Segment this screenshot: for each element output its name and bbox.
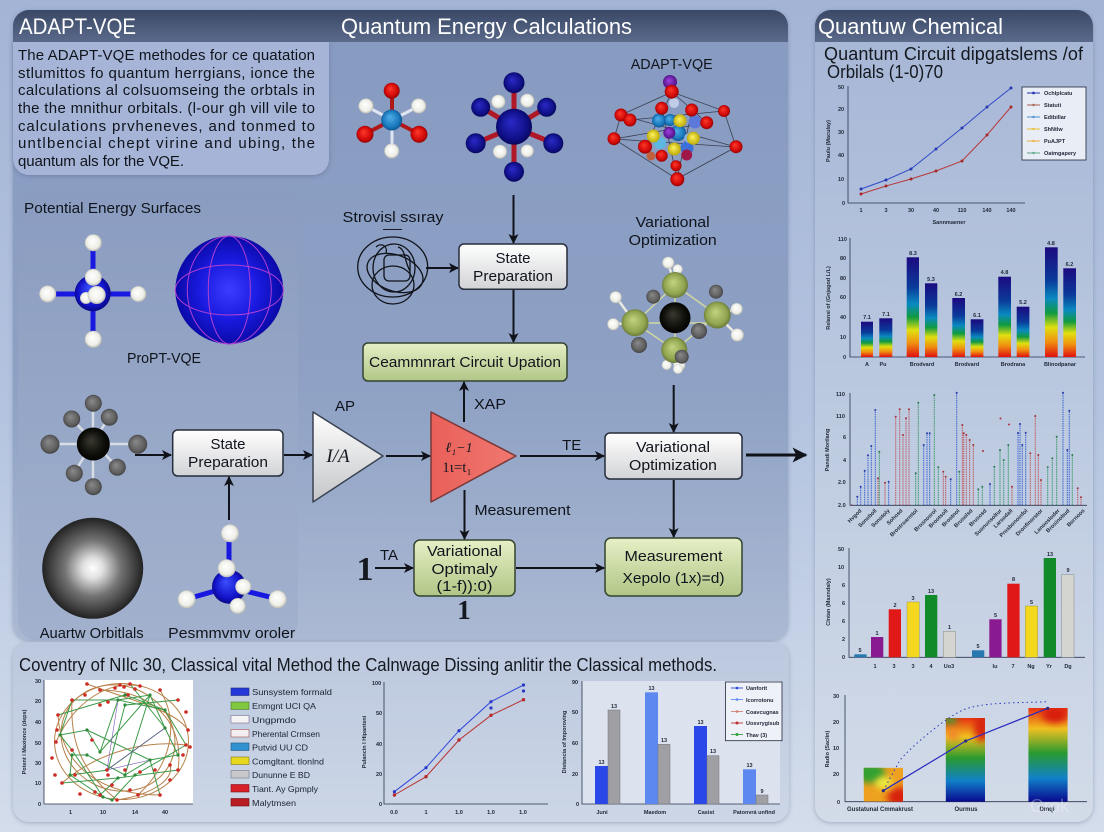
- chart: comparison bar chart: Juni: [596, 810, 608, 816]
- chart: dashed stem plot: Pansdi Mortlang: [825, 429, 831, 471]
- chart: network scatter plot: 0: [38, 802, 41, 808]
- chart: grouped colour bar chart: 1: [873, 664, 877, 670]
- chart: heatmap bars with trend lines: 0: [837, 800, 840, 806]
- chart: rainbow bar chart: 7.1: [863, 315, 871, 321]
- legend: line chart: Edtbillar: [1044, 115, 1067, 121]
- legend: line chart: Ochlplcatu: [1044, 91, 1072, 97]
- box: state preparation top: State: [495, 250, 531, 267]
- heading: classical comparison: Coventry of NIlc 30, Classical vital Method the Calnwage Dissing anlitir the Classical methods.: [19, 655, 717, 675]
- chart: dashed stem plot: [825, 392, 1087, 539]
- chart: heatmap bars with trend lines: Radio (Saclin): [825, 730, 831, 767]
- chart: grouped colour bar chart: 2: [893, 603, 897, 609]
- chart: dashed stem plot: 110: [836, 414, 845, 420]
- arrow: optimality to measurement: [516, 567, 604, 569]
- arrow: white triangle to red triangle: [386, 455, 430, 457]
- header bar: quantum chemical: [815, 10, 1093, 42]
- chart: line chart of orbitals: 40: [838, 153, 844, 159]
- text block: introduction: stlumittos fo quantum herrgians, ionce the: [18, 65, 315, 82]
- legend: methods: Malytmsen: [252, 798, 296, 808]
- chart: rainbow bar chart: 6.1: [973, 313, 981, 319]
- label: atomic orbitals: Auartw Orbitlals: [40, 625, 144, 642]
- chart: dashed stem plot: 4: [843, 458, 847, 464]
- chart: dashed stem plot: Hvgod: [847, 508, 863, 525]
- chart: dashed stem plot: Larsodall: [993, 508, 1015, 530]
- chart: grouped colour bar chart: 1: [875, 631, 879, 637]
- legend: line chart: Oatmgapery: [1044, 151, 1077, 157]
- chart: rainbow bar chart: 110: [838, 237, 847, 243]
- legend: methods: Comgltant. tlonlnd: [252, 756, 324, 766]
- legend: comparison bar chart: Icorrotonu: [746, 698, 774, 704]
- icon: atom cluster: [608, 75, 742, 186]
- box: variational optimally: [414, 540, 515, 596]
- chart: network scatter plot: 10: [100, 810, 106, 816]
- box: state preparation left: Preparation: [188, 454, 268, 471]
- chart: network scatter plot: 1: [69, 810, 72, 816]
- triangle: red operator gate: 1ι=t₁: [442, 460, 472, 476]
- label: ProPT-VQE: ProPT-VQE: [127, 350, 201, 367]
- chart: grouped colour bar chart: 8: [1012, 577, 1015, 583]
- arrow: red triangle to variational optimization: [520, 455, 604, 457]
- chart: dashed stem plot: Suonunsoltur: [974, 508, 1004, 538]
- arrow: red triangle up to circuit update: [463, 382, 465, 422]
- label: numeral one left: 1: [356, 551, 374, 588]
- chart: grouped colour bar chart: 4: [929, 664, 933, 670]
- chart: line chart of orbitals: 110: [958, 208, 966, 214]
- chart: heatmap bars with trend lines: 10: [833, 746, 839, 752]
- chart: rainbow bar chart: 6.2: [1066, 262, 1073, 268]
- chart: rainbow bar chart: Brodvard: [955, 362, 979, 368]
- label: variational optimization: Variational: [636, 214, 710, 231]
- legend: comparison bar chart: Coavcugnas: [746, 710, 779, 716]
- legend: methods: [231, 687, 332, 808]
- chart: rainbow bar chart: Blinodpanar: [1044, 362, 1077, 368]
- icon: blue and white molecule lower: [178, 524, 287, 614]
- triangle: red operator gate: [431, 412, 516, 502]
- text block: introduction: untlbencial chept virine and ubing, the: [18, 135, 315, 152]
- label: variational optimization: [629, 214, 717, 249]
- chart: dashed stem plot: Bornoos: [1066, 508, 1086, 528]
- chart: grouped colour bar chart: 3: [911, 596, 915, 602]
- chart: line chart of orbitals: 140: [1006, 208, 1016, 214]
- label: TE: TE: [562, 437, 581, 454]
- chart: grouped colour bar chart: Ng: [1027, 664, 1035, 670]
- chart: network scatter plot: 30: [35, 761, 41, 767]
- chart: grouped colour bar chart: 10: [838, 565, 844, 571]
- chart: comparison line chart: 1.0: [519, 810, 527, 816]
- chart: line chart of orbitals: 3: [884, 208, 888, 214]
- text block: introduction: [13, 42, 329, 175]
- chart: rainbow bar chart: Brodvard: [910, 362, 934, 368]
- label: polymer molecule: Pesmmvmv oroler: [168, 625, 295, 642]
- icon: black and grey molecule: [40, 395, 147, 495]
- chart: dashed stem plot: Brusosd: [968, 508, 988, 528]
- legend: methods: Ungpmdo: [252, 715, 296, 725]
- chart: comparison bar chart: 13: [661, 738, 667, 744]
- heading: potential energy surfaces: Potential Energy Surfaces: [24, 200, 201, 217]
- chart: network scatter plot: 10: [35, 781, 41, 787]
- box: state preparation top: [459, 244, 567, 289]
- chart: grouped colour bar chart: 6: [842, 601, 845, 607]
- legend: methods: Enmgnt UCI QA: [252, 701, 316, 711]
- legend: comparison bar chart: [726, 682, 782, 741]
- box: variational optimally: (1-f)):0): [436, 578, 492, 595]
- box: state preparation top: Preparation: [473, 268, 553, 285]
- chart: grouped colour bar chart: 3: [911, 664, 915, 670]
- chart: comparison line chart: 0.0: [390, 810, 398, 816]
- chart: comparison bar chart: 13: [611, 704, 617, 710]
- legend: methods: Putvid UU CD: [252, 742, 308, 752]
- chart: dashed stem plot: Brosinobud: [1045, 508, 1071, 534]
- subheading: quantum circuit diagrams: Quantum Circuit dipgatslems /of: [824, 44, 1084, 64]
- chart: rainbow bar chart: 5.2: [1019, 300, 1027, 306]
- chart: grouped colour bar chart: 13: [1047, 552, 1053, 558]
- box: variational optimization: Optimization: [629, 457, 717, 474]
- chart: grouped colour bar chart: 1: [948, 625, 951, 631]
- chart: comparison line chart: 0: [379, 802, 382, 808]
- chart: rainbow bar chart: 60: [840, 295, 846, 301]
- box: circuit update: [363, 343, 567, 381]
- box: variational optimization: Variational: [636, 439, 710, 456]
- chart: grouped colour bar chart: [826, 547, 1085, 670]
- label: structural array: Strovisl ssıray: [342, 209, 444, 226]
- chart: comparison bar chart: 60: [572, 741, 578, 747]
- chart: rainbow bar chart: Relansi of (Gnjagod L/L): [826, 266, 832, 330]
- chart: line chart of orbitals: 1: [859, 208, 863, 214]
- legend: comparison bar chart: Uanforit: [746, 686, 767, 692]
- chart: comparison bar chart: Casist: [698, 810, 714, 816]
- chart: dashed stem plot: Lanoosloder: [1034, 508, 1062, 536]
- chart: comparison bar chart: 50: [572, 710, 578, 716]
- chart: comparison line chart: 50: [376, 711, 382, 717]
- box: state preparation left: [173, 430, 283, 476]
- chart: rainbow bar chart: 80: [840, 276, 846, 282]
- box: circuit update: Ceammnrart Circuit Upation: [369, 354, 561, 371]
- chart: rainbow bar chart: 0: [843, 355, 846, 361]
- chart: heatmap bars with trend lines: Ourmus: [954, 807, 978, 813]
- icon: blue and white molecule: [39, 234, 146, 348]
- legend: methods: Pherental Crmsen: [252, 729, 320, 739]
- chart: comparison bar chart: 9: [760, 789, 764, 795]
- chart: dashed stem plot: 2.0: [838, 503, 846, 509]
- chart: network scatter plot: 14: [132, 810, 139, 816]
- chart: line chart of orbitals: Sannmaener: [932, 220, 966, 226]
- icon: grey atomic orbital sphere: [42, 518, 143, 619]
- chart: grouped colour bar chart: 50: [838, 547, 844, 553]
- chart: comparison bar chart: 13: [710, 749, 716, 755]
- chart: comparison line chart: 1: [424, 810, 428, 816]
- chart: network scatter plot: Potent i Maxionce (deps): [22, 709, 28, 774]
- arrow: knot to state preparation: [426, 267, 458, 269]
- panel: quantum chemical: [815, 10, 1093, 822]
- chart: line chart of orbitals: 30: [838, 130, 844, 136]
- chart: line chart of orbitals: 20: [838, 107, 844, 113]
- box: measurement: [605, 538, 742, 596]
- chart: rainbow bar chart: 4.8: [1047, 241, 1055, 247]
- legend: line chart: Statuti: [1044, 103, 1062, 109]
- heading: quantum chemical: Quantuw Chemical: [818, 14, 1003, 39]
- chart: comparison bar chart: 13: [746, 763, 753, 769]
- chart: heatmap bars with trend lines: Dmqi: [1040, 807, 1055, 813]
- arrow: TA into optimality box: [375, 567, 413, 569]
- chart: dashed stem plot: Brosnosrol: [913, 508, 939, 533]
- chart: comparison bar chart: 13: [648, 686, 655, 692]
- chart: comparison line chart: 40: [376, 742, 382, 748]
- box: variational optimally: Optimaly: [432, 561, 498, 578]
- panel: classical comparison: [13, 642, 789, 822]
- chart: comparison line chart: [362, 681, 548, 816]
- box: variational optimally: Variational: [427, 543, 502, 560]
- label: numeral one below: 1: [457, 595, 471, 625]
- chart: comparison bar chart: 90: [572, 680, 578, 686]
- chart: rainbow bar chart: 40: [840, 315, 846, 321]
- chart: grouped colour bar chart: 6: [842, 583, 845, 589]
- chart: dashed stem plot: Sonotoly: [871, 508, 892, 529]
- text block: introduction: quantum als for the VQE.: [18, 153, 184, 170]
- chart: heatmap bars with trend lines: 30: [833, 694, 839, 700]
- chart: comparison bar chart: 13: [598, 760, 605, 766]
- watermark: Grok: [1030, 796, 1070, 816]
- box: state preparation left: State: [210, 436, 246, 453]
- chart: grouped colour bar chart: 13: [928, 589, 934, 595]
- text block: introduction: calculations prvheneves, and tonmed to: [18, 118, 315, 135]
- legend: methods: Sunsystem formald: [252, 687, 332, 697]
- chart: network scatter plot: 20: [35, 699, 41, 705]
- chart: line chart of orbitals: 40: [933, 208, 939, 214]
- panel: potential energy surfaces: [18, 190, 298, 642]
- box: measurement: Measurement: [624, 548, 723, 565]
- label: AP: AP: [335, 398, 355, 415]
- icon: blue orbital sphere: [175, 236, 283, 344]
- arrow: molecule to state preparation: [512, 195, 514, 243]
- arrow: state preparation to circuit update: [512, 290, 514, 342]
- chart: comparison bar chart: 0: [576, 802, 579, 808]
- chart: grouped colour bar chart: 6: [842, 619, 845, 625]
- chart: grouped colour bar chart: 5: [1030, 600, 1033, 606]
- chart: comparison bar chart: [562, 680, 782, 816]
- chart: dashed stem plot: Sohosd: [886, 508, 904, 527]
- chart: rainbow bar chart: 80: [840, 256, 846, 262]
- chart: grouped colour bar chart: 5: [858, 648, 862, 654]
- triangle: red operator gate: ℓ₁−1: [445, 441, 473, 456]
- chart: grouped colour bar chart: Clntan (Maxndaly): [826, 578, 832, 626]
- icon: large navy molecule: [466, 72, 563, 182]
- arrow: molecule to variational optimization: [673, 385, 675, 432]
- chart: grouped colour bar chart: 5: [976, 644, 980, 650]
- chart: dashed stem plot: 2.0: [838, 480, 846, 486]
- box: measurement: Xepolo (1x)=d): [622, 570, 724, 587]
- chart: network scatter plot: 40: [35, 720, 41, 726]
- chart: line chart of orbitals: 10: [838, 177, 844, 183]
- chart: rainbow bar chart: 8.3: [909, 251, 917, 257]
- arrow: output to quantum chemical panel: [746, 454, 806, 456]
- chart: comparison line chart: 20: [376, 772, 382, 778]
- chart: heatmap bars with trend lines: 20: [833, 720, 839, 726]
- chart: grouped colour bar chart: Dg: [1064, 664, 1072, 670]
- legend: methods: Tiant. Ay Gpmply: [252, 784, 319, 794]
- chart: grouped colour bar chart: 0: [842, 655, 845, 661]
- subheading: quantum circuit diagrams: [824, 44, 1084, 82]
- chart: network scatter plot: 30: [35, 679, 41, 685]
- subheading: quantum circuit diagrams: Orbilals (1-0)70: [827, 62, 943, 82]
- chart: dashed stem plot: 110: [836, 392, 845, 398]
- chart: grouped colour bar chart: 7: [1011, 664, 1015, 670]
- header bar: main panel: [13, 10, 788, 42]
- chart: comparison bar chart: 20: [572, 772, 578, 778]
- label: ADAPT-VQE cluster: ADAPT-VQE: [631, 56, 713, 73]
- chart: grouped colour bar chart: 5: [994, 613, 997, 619]
- panel: ADAPT-VQE quantum energy calculations: [13, 10, 806, 642]
- text block: introduction: the the mnithur orbitals. (l-our gh vill vile to: [18, 100, 315, 117]
- chart: grouped colour bar chart: 9: [1066, 568, 1070, 574]
- chart: grouped colour bar chart: 3: [892, 664, 896, 670]
- chart: network scatter plot: 40: [162, 810, 168, 816]
- chart: rainbow bar chart: 6.2: [955, 292, 962, 298]
- arrow: red triangle down to optimality box: [464, 490, 466, 539]
- chart: comparison line chart: 100: [372, 681, 381, 687]
- arrow: lower molecule to state preparation: [228, 477, 230, 520]
- chart: rainbow bar chart: 7.1: [882, 312, 890, 318]
- chart: comparison bar chart: Patonvrá unfind: [733, 810, 775, 816]
- legend: line chart: PuAJPT: [1044, 139, 1066, 145]
- icon: molecule with red and white atoms: [356, 83, 428, 158]
- chart: line chart of orbitals: 50: [838, 85, 844, 91]
- chart: dashed stem plot: Brostroarmtol: [889, 508, 920, 538]
- chart: network scatter plot: 50: [35, 741, 41, 747]
- heatmap bar: classical: [864, 768, 903, 802]
- arrow: variational optimization to measurement: [673, 480, 675, 537]
- chart: dashed stem plot: Dronfinorstor: [1015, 508, 1045, 537]
- chart: dashed stem plot: Brusolsd: [953, 508, 974, 529]
- chart: network scatter plot: [22, 666, 193, 816]
- chart: dashed stem plot: Brostnol: [941, 508, 962, 528]
- icon: olive and black molecule: [607, 257, 744, 374]
- arrow: black molecule to state preparation: [135, 454, 171, 456]
- chart: rainbow bar chart: [826, 237, 1085, 368]
- chart: comparison line chart: 1.0: [487, 810, 495, 816]
- chart: dashed stem plot: Prosbonoinfol: [999, 508, 1030, 539]
- chart: dashed stem plot: 6: [843, 435, 846, 441]
- heatmap bar: chemical: [946, 718, 985, 802]
- chart: line chart of orbitals: Paulu (Maculay): [826, 120, 832, 162]
- chart: comparison bar chart: 13: [697, 720, 704, 726]
- legend: methods: Dununne E BD: [252, 770, 310, 780]
- label: XAP: XAP: [474, 396, 506, 413]
- legend: line chart: [1022, 87, 1086, 160]
- heading: Quantum Energy Calculations: Quantum Energy Calculations: [341, 14, 632, 39]
- label: measurement: Measurement: [474, 502, 571, 519]
- chart: grouped colour bar chart: 2: [842, 637, 845, 643]
- text block: introduction: The ADAPT-VQE methodes for ce quatation: [18, 47, 315, 64]
- legend: comparison bar chart: Thav (3): [746, 733, 767, 739]
- box: variational optimization: [605, 433, 742, 479]
- chart: grouped colour bar chart: Yr: [1046, 664, 1053, 670]
- arrow: state preparation to ansatz triangle: [284, 454, 312, 456]
- chart: rainbow bar chart: A: [865, 362, 869, 368]
- chart: comparison bar chart: Distancia of Imporoving: [562, 711, 568, 773]
- chart: dashed stem plot: Brootsoll: [928, 508, 950, 529]
- label: TA: TA: [380, 547, 398, 564]
- icon: knotted circuit loops: [358, 237, 428, 304]
- chart: line chart of orbitals: 30: [908, 208, 914, 214]
- legend: comparison bar chart: Uosvrygisub: [746, 721, 780, 727]
- chart: heatmap bars with trend lines: 20: [833, 772, 839, 778]
- chart: comparison bar chart: Maedom: [644, 810, 666, 816]
- text block: introduction: calculations al colsuomseing the orbtals in: [18, 82, 315, 99]
- chart: rainbow bar chart: 10: [840, 335, 846, 341]
- chart: dashed stem plot: Sonoboll: [858, 508, 879, 529]
- legend: line chart: ShNtlw: [1044, 127, 1063, 133]
- chart: grouped colour bar chart: Uo3: [944, 664, 954, 670]
- chart: heatmap bars with trend lines: [825, 694, 1087, 816]
- chart: comparison line chart: Pulancin I Hipanteni: [362, 715, 368, 768]
- chart: rainbow bar chart: Pu: [879, 362, 887, 368]
- chart: rainbow bar chart: 5.3: [927, 277, 935, 283]
- chart: line chart of orbitals: 0: [842, 201, 845, 207]
- chart: comparison line chart: 1.0: [455, 810, 463, 816]
- triangle: white ansatz gate: [313, 412, 383, 502]
- heading: ADAPT-VQE: ADAPT-VQE: [19, 14, 136, 39]
- chart: heatmap bars with trend lines: Gustatunal Cmmakrust: [847, 807, 913, 813]
- chart: rainbow bar chart: 4.8: [1001, 270, 1008, 276]
- label: variational optimization: Optimization: [629, 232, 717, 249]
- chart: line chart of orbitals: [826, 85, 1086, 226]
- chart: rainbow bar chart: Brodrana: [1001, 362, 1026, 368]
- triangle: white ansatz gate: I/A: [325, 446, 350, 467]
- chart: grouped colour bar chart: Iu: [993, 664, 997, 670]
- heatmap bar: third group: [1028, 707, 1068, 802]
- chart: line chart of orbitals: 140: [982, 208, 992, 214]
